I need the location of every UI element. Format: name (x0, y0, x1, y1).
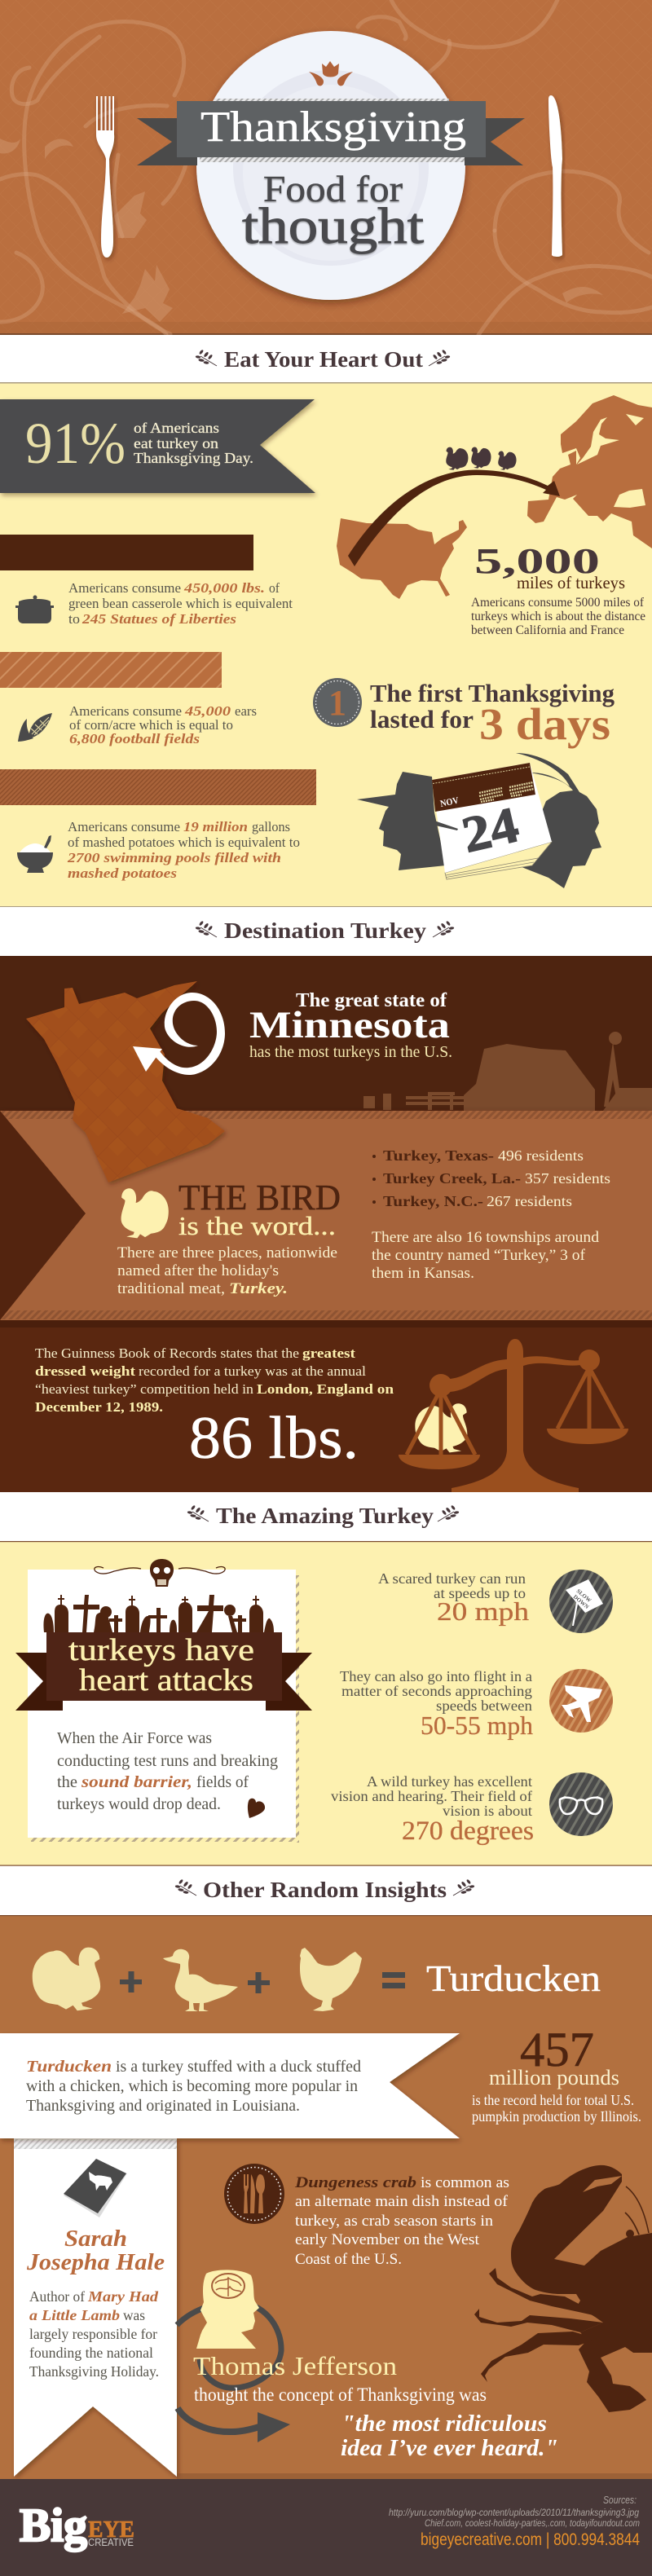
title: Food for thought (242, 168, 424, 254)
ribbon: Turducken definition: Thanksgiving and originated in Louisiana. (26, 2097, 300, 2115)
text: corn stat: 6,800 football fields (69, 731, 200, 746)
footer shadow (177, 2473, 652, 2479)
list: places named Turkey: Turkey Creek, La.- (383, 1170, 521, 1187)
icon: pot (15, 595, 54, 623)
text: Dungeness crab: early November on the West (295, 2232, 480, 2248)
turkey on the pan (415, 1403, 467, 1452)
text: three places: named after the holiday's (117, 1262, 279, 1279)
map: Minnesota (26, 981, 225, 1182)
icon: broken heart (248, 1799, 265, 1818)
text: 20 mph: 20 mph (437, 1596, 529, 1626)
text: Minnesota: Minnesota (249, 1004, 450, 1046)
native american silhouette (516, 753, 601, 888)
panel: eat your heart out (0, 382, 652, 908)
icon: bowl of mashed potatoes (17, 835, 53, 873)
map: Europe (527, 395, 652, 548)
equation: turkey + duck + chicken = turducken (33, 1948, 601, 2011)
icon: plus (120, 1971, 142, 1993)
heading: the first Thanksgiving lasted for 3 days: lasted for (370, 705, 474, 733)
stat: 5,000 miles of turkeys: 5,000 (474, 541, 600, 581)
text: Guinness record (35, 1345, 394, 1415)
section heading: Other Random Insights (0, 1866, 652, 1915)
badge: number 1 (313, 678, 362, 727)
ribbon: 91% of Americans: eat turkey on (134, 435, 218, 451)
list: places named Turkey (372, 1147, 610, 1209)
stat: 5,000 miles of turkeys: Americans consume 5000 miles of (471, 596, 645, 610)
heading: turkeys have heart attacks: turkeys have (68, 1633, 254, 1667)
heading: the bird is the word: is the word... (178, 1211, 336, 1240)
text: 270 degrees: vision and hearing. Their field of (331, 1788, 532, 1804)
list: places named Turkey: Turkey, Texas- (383, 1147, 494, 1164)
text: sound barrier: fields of (196, 1774, 249, 1791)
icon: chicken (300, 1948, 362, 2011)
text: sound barrier: When the Air Force was (57, 1730, 212, 1747)
ribbon: Turducken definition: is a turkey stuffed with a duck stuffed (116, 2058, 361, 2076)
text: casserole stat: 450,000 lbs. (183, 580, 265, 596)
text: 50-55 mph: speeds between (436, 1698, 532, 1714)
text: casserole stat (68, 580, 293, 627)
text: Thomas Jefferson quote: idea I’ve ever heard." (341, 2435, 558, 2461)
text: corn stat: 45,000 (184, 703, 231, 719)
text: Guinness record: December 12, 1989. (35, 1399, 163, 1415)
panel: destination turkey (0, 956, 652, 1492)
section heading: Destination Turkey: Destination Turkey (224, 918, 427, 943)
text: Guinness record: dressed weight (35, 1363, 135, 1379)
name: Sarah Josepha Hale: Josepha Hale (26, 2250, 165, 2275)
stat: 86 lbs.: 86 lbs. (189, 1405, 359, 1472)
ribbon: Turducken definition: Turducken (26, 2058, 112, 2076)
icon: glasses (549, 1772, 613, 1836)
bar: green bean casserole (0, 535, 253, 570)
text: Author of Mary Had a Little Lamb: Thanksgiving Holiday. (29, 2363, 159, 2380)
text: three places: Turkey. (229, 1280, 288, 1297)
text: Guinness record: London, England on (257, 1381, 394, 1397)
stat: 457 million pounds (472, 2023, 641, 2125)
icon: airplane (549, 1669, 613, 1733)
icon: book (64, 2159, 127, 2217)
text: casserole stat: 245 Statues of Liberties (82, 611, 236, 627)
text: Minnesota: has the most turkeys in the U.S. (249, 1043, 452, 1061)
logo: Big Eye Creative: Big (20, 2499, 87, 2552)
card: turkeys have heart attacks (15, 1559, 312, 1843)
text: sound barrier: the (57, 1774, 77, 1791)
logo: Big Eye Creative: CREATIVE (88, 2536, 134, 2548)
heading: turkeys have heart attacks (68, 1633, 254, 1698)
title ribbon (137, 99, 525, 165)
arrow: California to France (348, 469, 560, 566)
text: Dungeness crab (294, 2175, 509, 2268)
text: Author of Mary Had a Little Lamb: was (123, 2307, 145, 2323)
icon: slow down sign: DOWN (572, 1593, 590, 1610)
stat: 5,000 miles of turkeys (471, 541, 645, 637)
text: Thomas Jefferson quote (193, 2351, 558, 2461)
section heading: Other Random Insights: Other Random Insights (203, 1878, 447, 1902)
stat: 457 million pounds: million pounds (489, 2066, 619, 2089)
name: Sarah Josepha Hale (26, 2226, 165, 2275)
ribbon fold notch (0, 1111, 86, 1320)
text: casserole stat: of (269, 580, 280, 596)
calendar: NOV (439, 795, 460, 809)
stat: 457 million pounds: 457 (520, 2023, 594, 2076)
text: 50-55 mph: They can also go into flight in a (340, 1668, 532, 1684)
section heading: The Amazing Turkey (0, 1492, 652, 1541)
text: corn stat: ears (235, 703, 257, 719)
arrow: white swirl (133, 993, 225, 1075)
illustration: pilgrim, native american and calendar (357, 753, 601, 888)
calendar: 24 (457, 797, 523, 864)
hero: table setting (0, 0, 652, 335)
text: mashed potatoes stat (67, 819, 300, 881)
text: 20 mph: at speeds up to (434, 1585, 526, 1601)
stat: 5,000 miles of turkeys: turkeys which is about the distance (471, 610, 645, 623)
bar: mashed potatoes (0, 769, 316, 805)
icon: slow down sign: SLOW (575, 1587, 593, 1604)
text: mashed potatoes stat: mashed potatoes (68, 865, 177, 881)
text: Thomas Jefferson quote: Thomas Jefferson (193, 2351, 397, 2380)
text: 50-55 mph (340, 1668, 533, 1740)
list: places named Turkey: Turkey, N.C.- (383, 1193, 483, 1209)
text: Thomas Jefferson quote: thought the concept of Thanksgiving was (194, 2384, 487, 2405)
name: Sarah Josepha Hale: Sarah (64, 2226, 127, 2252)
illustration: graveyard (43, 1595, 274, 1632)
list: places named Turkey: 267 residents (487, 1193, 572, 1209)
decorative leaves (0, 139, 603, 322)
text: Author of Mary Had a Little Lamb: a Little Lamb (29, 2307, 120, 2323)
text: townships: There are also 16 townships around (372, 1229, 600, 1246)
icon: turkey (33, 1948, 100, 2010)
heading: the bird is the word (178, 1178, 341, 1240)
illustration: crab (474, 2165, 652, 2412)
ribbon: Turducken definition (0, 2033, 460, 2138)
heading: the first Thanksgiving lasted for 3 days (370, 679, 615, 749)
text: townships: the country named “Turkey,” 3 of (372, 1247, 586, 1264)
text: 20 mph: A scared turkey can run (378, 1570, 526, 1587)
heading: the first Thanksgiving lasted for 3 days: 3 days (479, 699, 610, 749)
text: casserole stat: Americans consume (68, 580, 181, 596)
panel: the amazing turkey (0, 1541, 652, 1866)
text: 270 degrees: A wild turkey has excellent (367, 1773, 532, 1790)
icon: fork (96, 96, 114, 258)
text: 270 degrees: 270 degrees (402, 1816, 534, 1846)
ribbon: banner (15, 1653, 63, 1711)
stat: 457 million pounds: pumpkin production by Illinois. (472, 2108, 641, 2125)
ribbon: 91% of Americans (0, 399, 315, 493)
stat: 457 million pounds: is the record held for total U.S. (472, 2092, 634, 2108)
section heading: The Amazing Turkey: The Amazing Turkey (216, 1504, 434, 1528)
ribbon: the bird (0, 1111, 652, 1320)
text: 50-55 mph: 50-55 mph (421, 1711, 533, 1740)
text: corn stat: Americans consume (69, 703, 182, 719)
bar: corn (0, 652, 222, 688)
plate (196, 31, 465, 300)
icon: equals (382, 1972, 405, 1988)
text: sound barrier: sound barrier, (81, 1774, 192, 1791)
icon: Jefferson silhouette with brain (196, 2270, 259, 2349)
ribbon: 91% of Americans: Thanksgiving Day. (134, 450, 253, 466)
text: Dungeness crab: is common as (421, 2175, 509, 2191)
pilgrim silhouette (357, 772, 446, 870)
text: mashed potatoes stat: 2700 swimming pools filled with (67, 850, 281, 865)
text: sound barrier: turkeys would drop dead. (57, 1796, 221, 1813)
text: Dungeness crab: Dungeness crab (294, 2175, 416, 2191)
icon: tulip ornament (309, 61, 353, 86)
arrow: loop around Jefferson (177, 2302, 290, 2442)
text: corn stat: of corn/acre which is equal to (69, 717, 233, 733)
text: sound barrier (57, 1730, 278, 1813)
text: mashed potatoes stat: 19 million (183, 819, 248, 834)
text: Minnesota: The great state of (296, 990, 447, 1011)
text: Guinness record: recorded for a turkey was at the annual (139, 1363, 366, 1379)
icon: slow down sign (549, 1570, 613, 1633)
text: Author of Mary Had a Little Lamb: largely responsible for (29, 2326, 157, 2342)
section heading: Eat Your Heart Out (0, 335, 652, 382)
text: sound barrier: conducting test runs and breaking (57, 1753, 278, 1770)
icon: duck (163, 1949, 238, 2011)
section heading: Destination Turkey (0, 907, 652, 956)
text: sources: Sources: (603, 2494, 637, 2506)
calendar (430, 763, 552, 879)
text: 50-55 mph: matter of seconds approaching (341, 1683, 532, 1699)
panel: Guinness record background (0, 1320, 652, 1492)
text: 270 degrees (331, 1773, 534, 1846)
text: Dungeness crab: turkey, as crab season starts in (295, 2213, 493, 2230)
icon: three turkeys on the arrow (446, 447, 517, 470)
text: casserole stat: to (68, 611, 80, 627)
illustration: scale with turkey (399, 1339, 628, 1492)
text: three places (117, 1244, 337, 1297)
heading: turkeys have heart attacks: heart attacks (79, 1663, 253, 1698)
text: mashed potatoes stat: of mashed potatoes which is equivalent to (68, 834, 300, 850)
illustration: farm silhouette (363, 1032, 652, 1111)
text: townships: them in Kansas. (372, 1265, 474, 1282)
text: corn stat (69, 703, 257, 746)
text: Guinness record: The Guinness Book of Records states that the (35, 1345, 299, 1361)
text: mashed potatoes stat: Americans consume (68, 819, 180, 834)
stat: 5,000 miles of turkeys: between California and France (471, 623, 624, 637)
logo: Big Eye Creative (20, 2499, 134, 2552)
text: 20 mph (378, 1570, 529, 1626)
text: three places: traditional meat, (117, 1280, 225, 1297)
title: Food for thought: Food for (263, 168, 403, 209)
ribbon: 91% of Americans: 91% (25, 411, 126, 476)
text: Author of Mary Had a Little Lamb: founding the national (29, 2345, 153, 2361)
heading: the first Thanksgiving lasted for 3 days: The first Thanksgiving (370, 679, 615, 707)
text: three places: There are three places, nationwide (117, 1244, 337, 1262)
ribbon: 91% of Americans: of Americans (134, 420, 219, 436)
map: United States (337, 518, 467, 599)
footer (0, 2479, 652, 2576)
section heading: Eat Your Heart Out: Eat Your Heart Out (224, 347, 423, 372)
text: Author of Mary Had a Little Lamb (29, 2288, 159, 2380)
text: Dungeness crab: an alternate main dish instead of (295, 2194, 509, 2210)
text: Guinness record: “heaviest turkey” competition held in (35, 1381, 254, 1397)
text: Author of Mary Had a Little Lamb: Author of (29, 2288, 85, 2305)
badge: cutlery medallion (224, 2164, 284, 2224)
text: townships (372, 1229, 600, 1282)
title: Food for thought: thought (242, 199, 424, 254)
icon: plus (248, 1972, 270, 1993)
logo: Big Eye Creative: EYE (88, 2517, 134, 2543)
text: Minnesota (249, 990, 452, 1061)
text: Author of Mary Had a Little Lamb: Mary Had (87, 2288, 159, 2305)
list: places named Turkey: 357 residents (525, 1170, 610, 1187)
icon: knife (548, 95, 562, 257)
badge: number 1: 1 (328, 683, 346, 723)
text: sources (389, 2494, 640, 2529)
text: mashed potatoes stat: gallons (252, 819, 290, 834)
text: Guinness record: greatest (302, 1345, 355, 1361)
title: Thanksgiving: Thanksgiving (200, 103, 466, 151)
text: Turducken: Turducken (426, 1958, 601, 1999)
text: casserole stat: green bean casserole which is equivalent (68, 596, 293, 611)
floral background swirls (0, 0, 652, 335)
icon: corn (18, 713, 52, 742)
heading: the bird is the word: THE BIRD (178, 1178, 341, 1218)
ribbon: Turducken definition: with a chicken, which is becoming more popular in (26, 2077, 358, 2095)
stat: 5,000 miles of turkeys: miles of turkeys (517, 573, 625, 592)
panel: other random insights (0, 1915, 652, 2479)
list: places named Turkey: 496 residents (498, 1147, 584, 1164)
ribbon: Sarah Josepha Hale (14, 2138, 177, 2477)
icon: cream turkey (121, 1188, 169, 1238)
icon: skull with flourishes (95, 1559, 225, 1587)
text: Thomas Jefferson quote: "the most ridiculous (341, 2411, 547, 2437)
text: 270 degrees: vision is about (443, 1803, 532, 1819)
text: Dungeness crab: Coast of the U.S. (295, 2252, 402, 2268)
